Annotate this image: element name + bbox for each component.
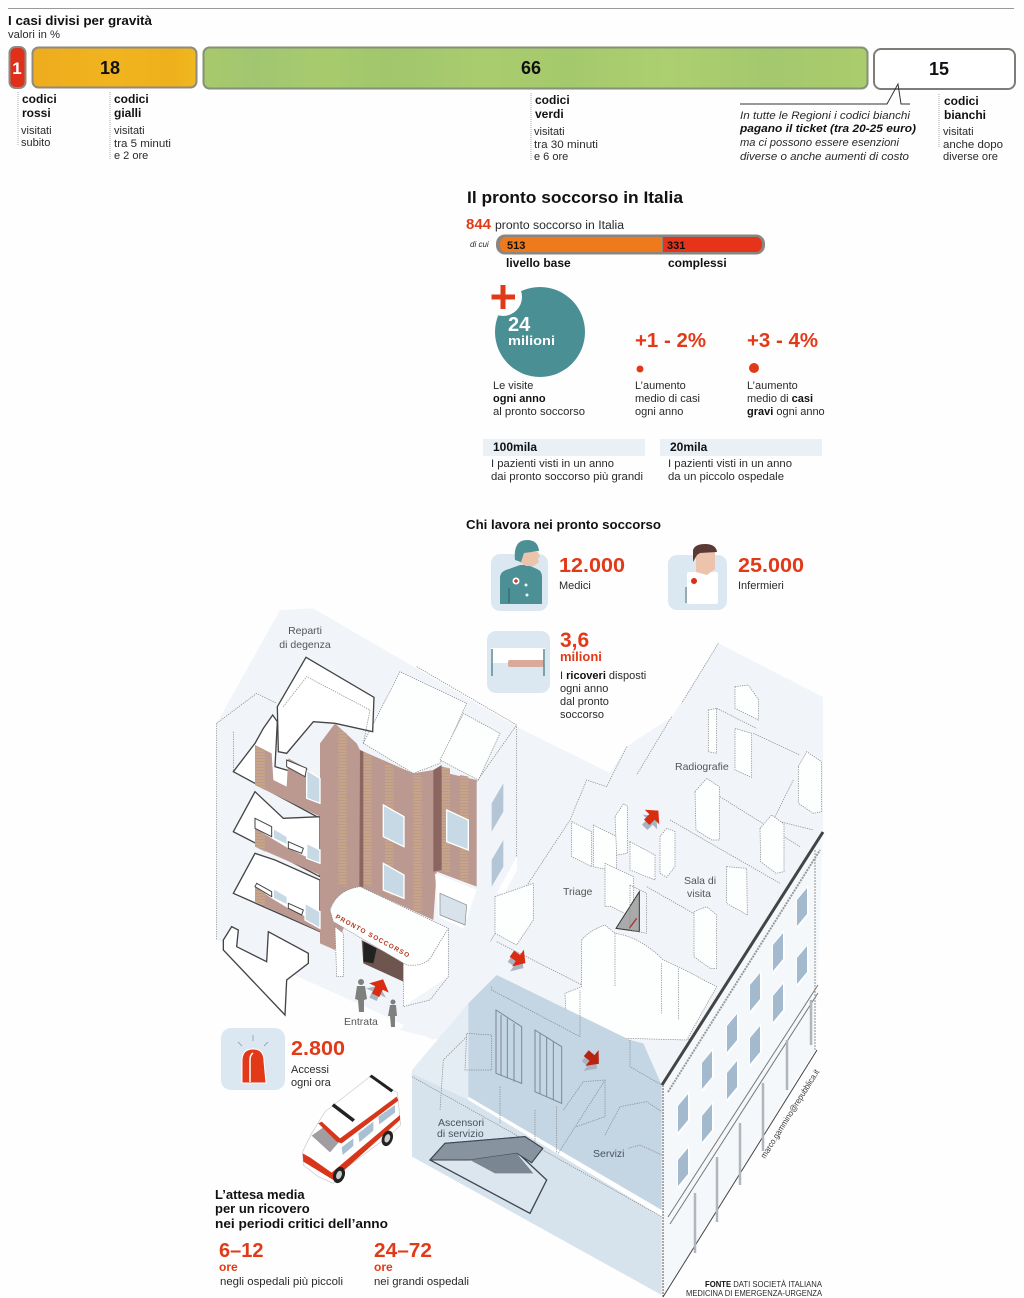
heading: attesa media: L’attesa media <box>215 1187 305 1202</box>
label: reparti di degenza: di degenza <box>279 639 331 651</box>
stat: ricoveri: 3,6 <box>560 629 589 652</box>
illustration: ground floor of right wing <box>412 975 662 1295</box>
callout: ticket codici bianchi: In tutte le Regioni i codici bianchi <box>740 110 911 122</box>
stat: accessi ogni ora: ogni ora <box>291 1077 332 1089</box>
ground floor pilasters <box>695 1000 811 1253</box>
bar: livello base e complessi <box>470 234 765 270</box>
floor slabs <box>233 715 320 818</box>
text: visite ogni anno: al pronto soccorso <box>493 406 585 418</box>
stat: ricoveri: milioni <box>560 649 602 664</box>
credit: author email: marco.gammino@repubblica.it <box>758 1067 822 1160</box>
bar: livello base e complessi: 331 <box>667 240 685 252</box>
top rule <box>8 8 1014 10</box>
heading: attesa media <box>215 1187 388 1231</box>
total: 844 pronto soccorso: pronto soccorso in Italia <box>495 220 625 232</box>
segment: codici bianchi <box>874 49 1015 89</box>
label: codici verdi: verdi <box>535 107 564 121</box>
illustration: upper floor of right wing <box>490 643 822 1053</box>
stat: 20mila pazienti: I pazienti visti in un anno <box>668 458 792 470</box>
label: reparti di degenza: Reparti <box>288 625 322 637</box>
stairs <box>430 1137 547 1213</box>
stat: medici <box>559 555 625 592</box>
label: codici gialli: e 2 ore <box>114 150 148 162</box>
circle: 24 milioni di visite <box>484 278 585 377</box>
stat: +3-4%: medio di casi <box>747 393 813 405</box>
wall openings <box>465 1033 492 1070</box>
label: codici gialli: tra 5 minuti <box>114 138 171 150</box>
stat: +3-4% <box>747 330 825 418</box>
stat: infermieri: 25.000 <box>738 555 804 577</box>
brick columns <box>338 728 347 887</box>
stat: accessi ogni ora: Accessi <box>291 1064 329 1076</box>
label: sala di visita: Sala di <box>684 875 716 887</box>
label: codici rossi <box>18 92 57 149</box>
label: ascensori di servizio: di servizio <box>437 1128 484 1140</box>
label: codici verdi <box>531 93 598 163</box>
label: codici gialli: gialli <box>114 106 141 120</box>
stat: 100mila pazienti <box>483 439 645 483</box>
icon: nurse <box>668 544 727 610</box>
arrow: servizi <box>578 1045 605 1077</box>
heading: attesa media: nei periodi critici dell’anno <box>215 1216 388 1231</box>
text: visite ogni anno: ogni anno <box>493 393 546 405</box>
upper roof <box>363 672 467 773</box>
source: MEDICINA DI EMERGENZA-URGENZA <box>686 1288 822 1298</box>
stat: medici: 12.000 <box>559 555 625 577</box>
stat: 6-12 ore <box>219 1240 343 1288</box>
radiology walls <box>735 685 758 720</box>
label: codici rossi: rossi <box>22 106 51 120</box>
stat: ricoveri: dal pronto <box>560 696 609 708</box>
arrow: triage <box>504 945 531 977</box>
stat: infermieri: Infermieri <box>738 580 784 592</box>
heading: casi divisi per gravità: I casi divisi per gravità <box>8 13 153 28</box>
label: codici bianchi: diverse ore <box>943 151 998 163</box>
brick walls <box>255 745 320 817</box>
label: codici verdi: visitati <box>534 126 565 138</box>
stat: 6-12 ore: ore <box>219 1260 238 1274</box>
barred windows <box>496 1010 562 1103</box>
illustration: ambulance <box>303 1075 401 1185</box>
total: 844 pronto soccorso: 844 <box>466 216 492 233</box>
stacked bar: severity codes <box>10 47 1015 89</box>
stat: +1-2%: L’aumento <box>635 380 686 392</box>
stat: 100mila pazienti: dai pronto soccorso più grandi <box>491 471 643 483</box>
source: FONTE DATI SOCIETÀ ITALIANA <box>705 1279 822 1289</box>
segment: codici bianchi: 15 <box>929 59 949 79</box>
segment: codici rossi: 1 <box>12 59 22 78</box>
circle: 24 milioni di visite: 24 <box>508 314 531 336</box>
label: entrata: Entrata <box>344 1016 378 1028</box>
stat: +1-2%: medio di casi <box>635 393 700 405</box>
text: visite ogni anno <box>493 380 585 418</box>
illustration: street facade <box>662 832 823 1297</box>
segment: codici verdi <box>204 48 868 88</box>
windows <box>307 770 320 803</box>
stat: accessi ogni ora <box>291 1038 345 1089</box>
stat: 24-72 ore: nei grandi ospedali <box>374 1276 469 1288</box>
label: codici verdi: codici <box>535 93 570 107</box>
stat: infermieri <box>738 555 804 592</box>
heading: il pronto soccorso in Italia: Il pronto soccorso in Italia <box>467 188 684 207</box>
courtyard wall <box>223 927 308 1015</box>
stat: +3-4%: L’aumento <box>747 380 798 392</box>
stat: 20mila pazienti: da un piccolo ospedale <box>668 471 784 483</box>
label: codici bianchi: codici <box>944 94 979 108</box>
annex <box>435 873 477 928</box>
total: 844 pronto soccorso <box>466 216 625 233</box>
callout: ticket codici bianchi: ma ci possono essere esenzioni <box>740 137 900 149</box>
stat: +1-2%: ogni anno <box>635 406 683 418</box>
stat: 100mila pazienti: I pazienti visti in un anno <box>491 458 614 470</box>
label: codici bianchi <box>939 94 1003 163</box>
wash: right wing background <box>400 643 823 1085</box>
stat: ricoveri: soccorso <box>560 709 604 721</box>
stat: +3-4%: gravi ogni anno <box>747 406 825 418</box>
circle: 24 milioni di visite: milioni <box>508 333 555 348</box>
callout: ticket codici bianchi: pagano il ticket (tra 20-25 euro) <box>739 123 916 135</box>
dark stair opening <box>616 892 639 932</box>
label: codici verdi: tra 30 minuti <box>534 139 598 151</box>
segment: codici gialli: 18 <box>100 58 120 78</box>
label: codici bianchi: visitati <box>943 126 974 138</box>
segment: codici gialli <box>32 48 196 88</box>
icon: doctor <box>491 540 548 611</box>
entrance door <box>362 940 403 982</box>
label: codici gialli: codici <box>114 92 149 106</box>
icon: alarm light <box>221 1028 285 1090</box>
label: sala di visita <box>684 875 716 900</box>
stat: 6-12 ore: 6–12 <box>219 1240 264 1262</box>
illustration: left building wing <box>217 608 520 1040</box>
stat: 100mila pazienti: 100mila <box>493 440 537 454</box>
label: codici rossi: codici <box>22 92 57 106</box>
sign: pronto soccorso: PRONTO SOCCORSO <box>334 914 411 960</box>
bar: livello base e complessi: di cui <box>470 240 489 249</box>
stat: ricoveri: I ricoveri disposti <box>560 670 646 682</box>
stat: +3-4%: +3 - 4% <box>747 330 818 352</box>
stat: 6-12 ore: negli ospedali più piccoli <box>220 1276 343 1288</box>
label: codici bianchi: bianchi <box>944 108 986 122</box>
bar: livello base e complessi: livello base <box>506 256 571 270</box>
heading: chi lavora: Chi lavora nei pronto soccorso <box>466 517 661 532</box>
stat: 24-72 ore: ore <box>374 1260 393 1274</box>
arrow: entrance <box>363 975 393 1004</box>
stat: accessi ogni ora: 2.800 <box>291 1038 345 1060</box>
icon: hospital bed <box>487 631 550 693</box>
bar: livello base e complessi: complessi <box>668 256 727 270</box>
label: servizi: Servizi <box>593 1148 625 1160</box>
icon: people at entrance <box>355 979 397 1027</box>
label: sala di visita: visita <box>687 888 711 900</box>
stat: ricoveri: ogni anno <box>560 683 608 695</box>
label: codici rossi: subito <box>21 137 50 149</box>
label: codici gialli: visitati <box>114 125 145 137</box>
label: codici verdi: e 6 ore <box>534 151 568 163</box>
label: codici bianchi: anche dopo <box>943 139 1003 151</box>
label: codici gialli <box>110 92 171 162</box>
heading: attesa media: per un ricovero <box>215 1201 310 1216</box>
stat: +1-2%: +1 - 2% <box>635 330 706 352</box>
label: triage: Triage <box>563 886 593 898</box>
label: codici rossi: visitati <box>21 125 52 137</box>
callout: ticket codici bianchi <box>739 84 916 163</box>
text: visite ogni anno: Le visite <box>493 380 533 392</box>
icon: red cross <box>492 285 515 309</box>
label: radiografie: Radiografie <box>675 761 729 773</box>
stat: 24-72 ore: 24–72 <box>374 1240 432 1262</box>
label: ascensori di servizio: Ascensori <box>438 1117 484 1129</box>
bar: livello base e complessi: 513 <box>507 240 525 252</box>
stat: +1-2% <box>635 330 706 418</box>
canopy <box>330 887 448 965</box>
interior parapets <box>287 760 307 777</box>
facade windows <box>796 885 809 930</box>
label: reparti di degenza <box>279 625 331 651</box>
arrow: radiografie <box>637 803 666 835</box>
stat: ricoveri <box>560 629 646 721</box>
stat: 20mila pazienti <box>660 439 822 483</box>
room walls <box>660 828 675 877</box>
heading: casi divisi per gravità: valori in % <box>8 29 60 41</box>
stat: medici: Medici <box>559 580 591 592</box>
stat: 24-72 ore <box>374 1240 469 1288</box>
arched room <box>565 925 717 1040</box>
heading: casi divisi per gravità <box>8 13 153 41</box>
segment: codici rossi <box>10 47 26 88</box>
entrance pillars <box>335 927 343 977</box>
segment: codici verdi: 66 <box>521 58 541 78</box>
stat: 20mila pazienti: 20mila <box>670 440 708 454</box>
callout: ticket codici bianchi: diverse o anche aumenti di costo <box>740 151 909 163</box>
label: ascensori di servizio <box>437 1117 484 1140</box>
source <box>686 1279 822 1298</box>
